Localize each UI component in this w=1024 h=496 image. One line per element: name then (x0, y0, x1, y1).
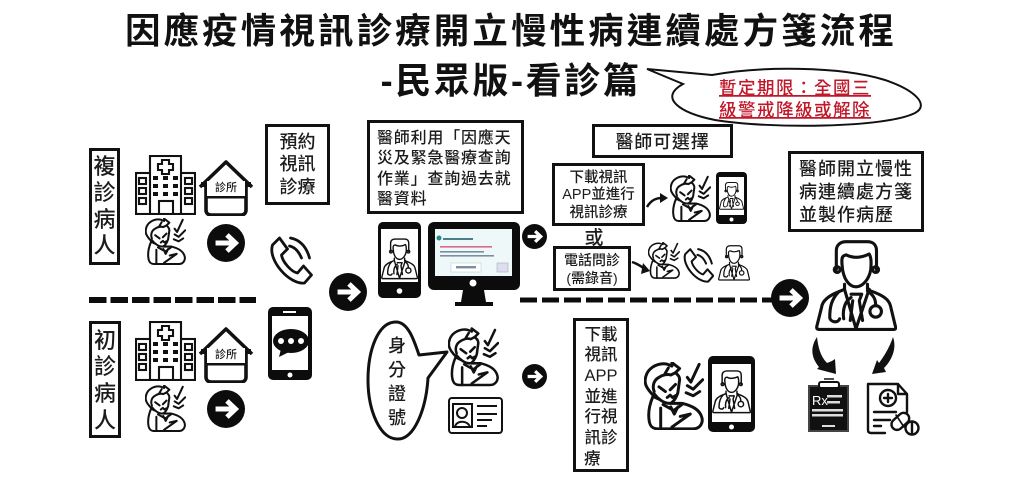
box: download app for video visit: 下載視訊 (570, 169, 628, 186)
label: returning patient: 病 (93, 207, 116, 232)
icon: phone with doctor (378, 222, 421, 298)
icon: patient phone visit (649, 243, 679, 278)
icon: doctor small (719, 246, 749, 280)
arrow: video option (647, 193, 668, 207)
box: download app first visit: 視訊 (584, 345, 618, 364)
label: returning patient: 人 (93, 233, 116, 258)
callout: temporary period (647, 69, 921, 126)
arrow: small upper (522, 224, 547, 249)
icon: clinic (returning) (200, 162, 252, 215)
icon: prescription clipboard: Rx (812, 393, 828, 408)
icon: phone with doctor video (716, 172, 747, 224)
box: phone consultation: 電話問診 (564, 252, 620, 268)
box: download app for video visit: APP並進行 (562, 186, 635, 203)
arrow: first-visit patient (207, 390, 245, 428)
box: download app first visit: 行視 (584, 407, 618, 426)
icon: sick patient first visit step (449, 328, 498, 385)
box: phone consultation (554, 248, 630, 290)
speech bubble: ID number: 身 (388, 336, 406, 356)
box: doctor may choose: 醫師可選擇 (616, 132, 710, 152)
speech bubble: ID number (368, 322, 447, 439)
box: download app for video visit (554, 164, 644, 224)
icon: patient video visit (671, 176, 710, 221)
label: first-visit patient: 診 (94, 354, 116, 379)
icon: hospital (returning) (136, 156, 195, 214)
box: doctor issues prescription: 並製作病歷 (799, 205, 894, 225)
box: doctor may choose (594, 126, 732, 156)
icon: sick patient (first visit) (146, 386, 185, 431)
box: download app first visit: 並進 (584, 387, 618, 406)
speech bubble: ID number: 分 (388, 360, 406, 380)
title (125, 11, 897, 101)
icon: hospital (first visit) (136, 322, 195, 380)
icon: ID card (449, 398, 502, 433)
box: book video appointment: 視訊 (280, 154, 316, 174)
label: first-visit patient: 人 (94, 408, 116, 433)
arrow: to medical record (872, 337, 894, 374)
label: first-visit patient: 初 (94, 328, 116, 353)
arrow: to doctor step (329, 273, 367, 311)
arrow: phone option (632, 262, 650, 274)
dashed divider left (89, 297, 256, 303)
text: or: 或 (584, 227, 604, 249)
dashed divider right (520, 298, 775, 302)
icon: clinic (first visit) (200, 329, 252, 382)
label: first-visit patient (90, 322, 120, 436)
box: doctor queries records: 災及緊急醫療查詢 (377, 149, 511, 167)
box: download app for video visit: 視訊診療 (570, 204, 628, 221)
callout: temporary period: 暫定期限：全國三 (719, 78, 871, 98)
icon: telephone small (685, 249, 713, 282)
icon: clinic (returning): 診所 (215, 180, 237, 194)
callout: temporary period: 級警戒降級或解除 (719, 100, 871, 120)
box: doctor queries records: 作業」查詢過去就 (377, 170, 511, 188)
icon: prescription clipboard (808, 379, 849, 432)
label: returning patient (90, 150, 118, 264)
box: download app first visit: APP (584, 367, 618, 385)
icon: clinic (first visit): 診所 (215, 347, 237, 361)
box: doctor queries records (368, 122, 522, 212)
box: doctor issues prescription (790, 152, 922, 230)
icon: mobile chat (268, 307, 312, 380)
arrow: to final step (771, 279, 809, 317)
label: first-visit patient: 病 (94, 381, 116, 406)
label: returning patient: 複 (93, 154, 116, 179)
box: download app first visit: 下載 (584, 325, 618, 344)
label: returning patient: 診 (93, 180, 116, 205)
box: download app first visit: 訊診 (584, 428, 618, 447)
box: phone consultation: (需錄音) (566, 270, 618, 286)
speech bubble: ID number: 號 (388, 408, 406, 428)
box: book video appointment: 診療 (280, 177, 316, 197)
box: doctor issues prescription: 醫師開立慢性 (799, 159, 913, 179)
title: 因應疫情視訊診療開立慢性病連續處方箋流程 (125, 11, 897, 51)
icon: medical record with pills (868, 384, 918, 434)
arrow: small lower (522, 364, 547, 389)
icon: doctor (817, 242, 896, 329)
icon: telephone (272, 238, 312, 283)
title: -民眾版-看診篇 (381, 60, 641, 101)
box: download app first visit (574, 320, 628, 470)
box: book video appointment (266, 126, 328, 204)
speech bubble: ID number: 證 (388, 384, 406, 404)
arrow: to prescription (812, 337, 836, 374)
icon: tablet with doctor (708, 356, 755, 432)
box: download app first visit: 療 (584, 449, 601, 468)
icon: sick patient video (645, 363, 703, 429)
box: doctor queries records: 醫師利用「因應天 (377, 128, 511, 147)
box: doctor queries records: 醫資料 (377, 189, 427, 208)
box: book video appointment: 預約 (280, 132, 316, 152)
arrow: returning patient (207, 224, 245, 262)
icon: monitor with query screen (428, 222, 520, 306)
box: doctor issues prescription: 病連續處方箋 (799, 181, 913, 202)
icon: sick patient (returning) (146, 219, 185, 264)
